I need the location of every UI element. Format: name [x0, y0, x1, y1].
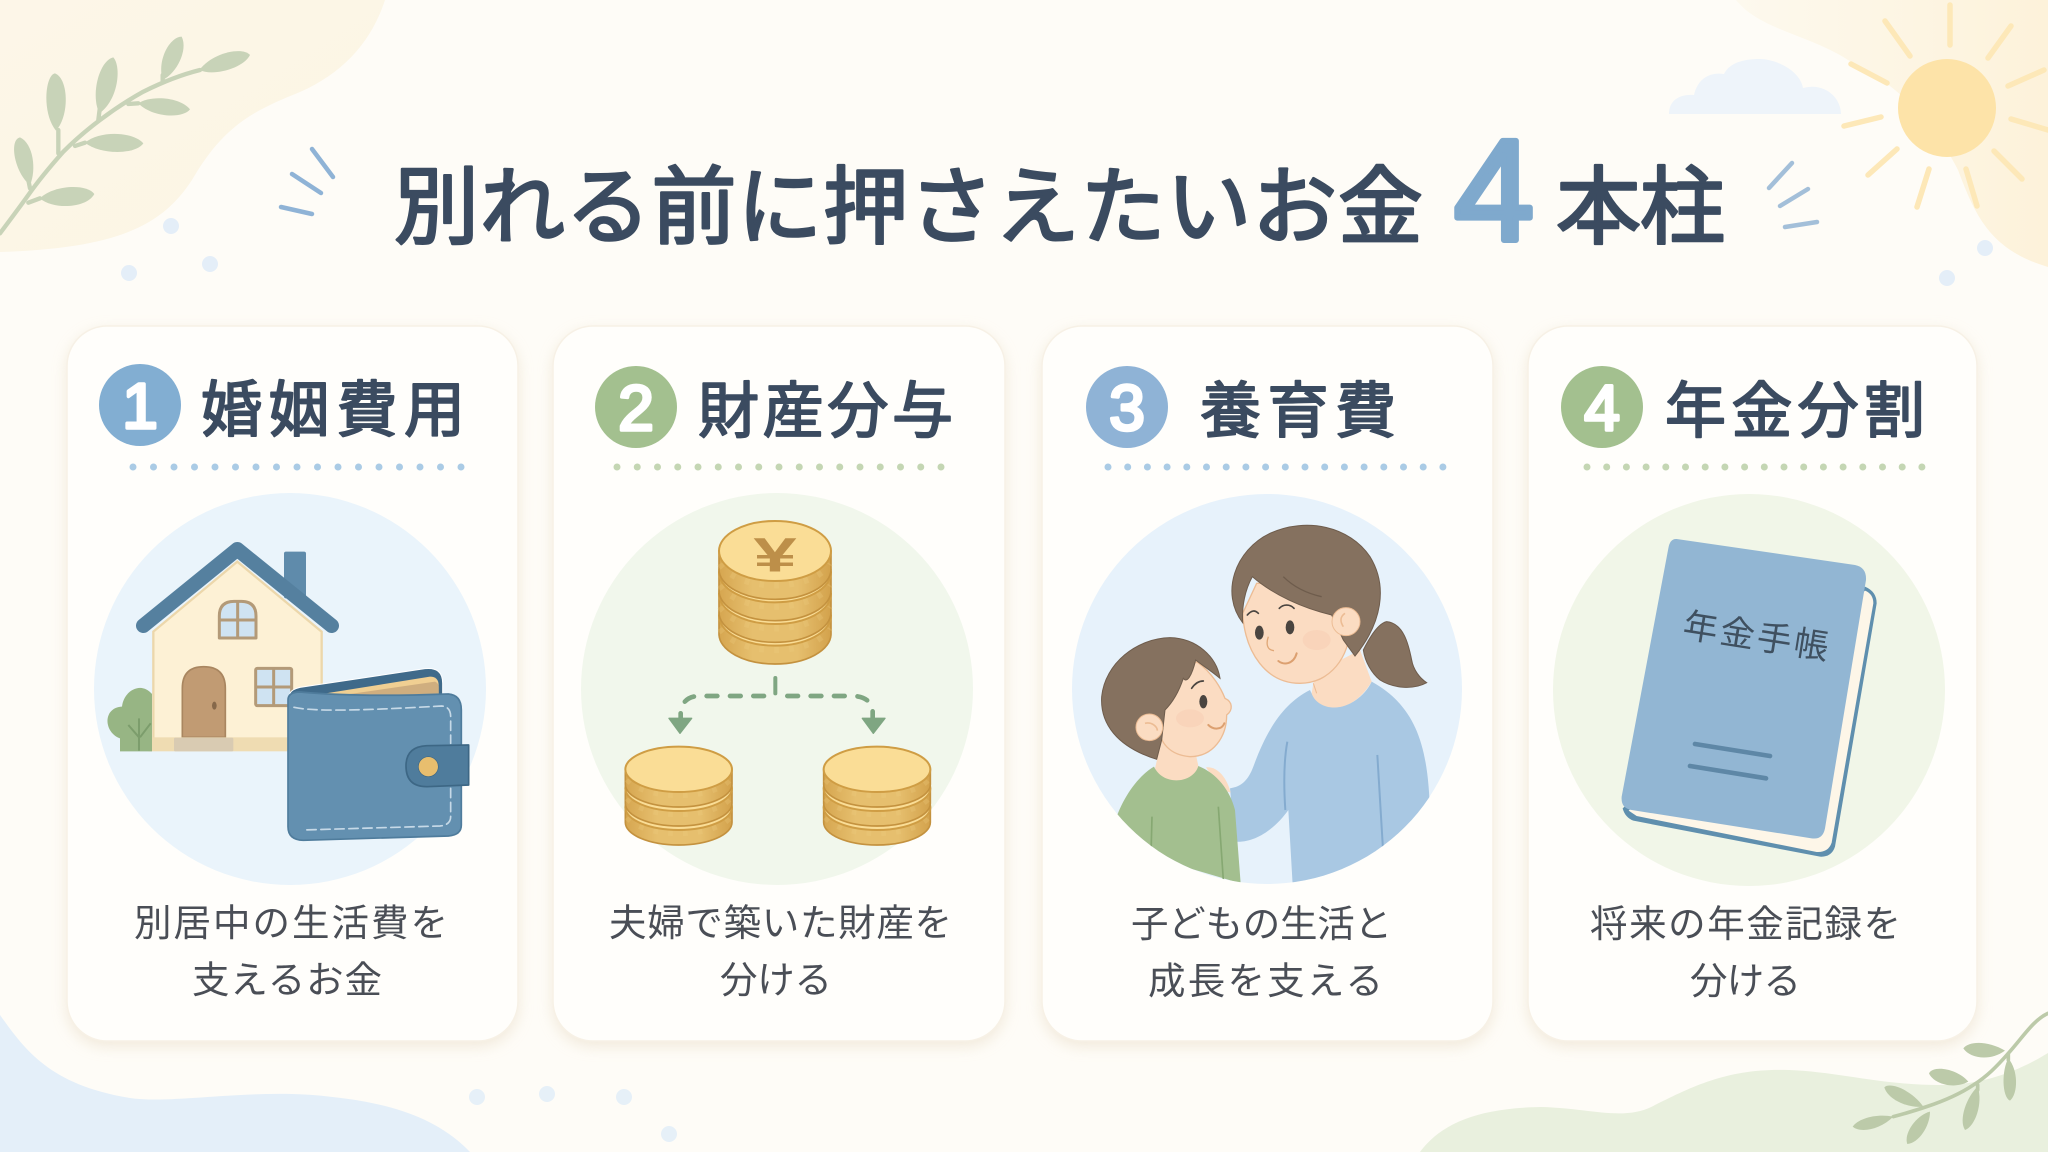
body text: 子どもの生活と: [1131, 903, 1392, 945]
background blob: top left: [0, 0, 385, 252]
number badge 2: [595, 366, 677, 448]
body text: 支えるお金: [192, 959, 382, 1001]
icon: house: [107, 549, 332, 751]
icon: right coin stack: [824, 747, 930, 845]
number badge 2: 2: [618, 372, 654, 444]
icon: left coin stack: [625, 747, 732, 845]
heading: 婚姻費用: 婚姻費用: [201, 376, 465, 444]
number badge 1: [99, 364, 181, 446]
panel: 婚姻費用: [67, 326, 518, 1041]
number badge 1: 1: [122, 370, 158, 442]
handbook label: 年金手帳: [1680, 607, 1831, 668]
icon: yen coin stack: ¥: [753, 527, 797, 582]
heading: 年金分割: 年金分割: [1665, 377, 1925, 445]
background blob: top right: [1736, 0, 2048, 267]
number badge 3: 3: [1109, 372, 1145, 444]
icon: pension handbook: [1622, 539, 1877, 857]
body text: 成長を支える: [1148, 960, 1383, 1002]
heading: 養育費: 養育費: [1200, 377, 1396, 445]
body text: 別居中の生活費を: [134, 902, 448, 944]
dotted divider: [133, 464, 462, 470]
illustration circle: pale green: [1553, 494, 1945, 886]
illustration circle: blue: [1072, 494, 1462, 884]
icon: sparkle lines right of title: [1769, 163, 1817, 227]
dotted divider: [1587, 464, 1922, 470]
panel: 養育費: [1042, 326, 1493, 1041]
body text: 分ける: [720, 959, 832, 1001]
icon: mother and child: [1102, 525, 1430, 885]
heading: 財産分与: 財産分与: [698, 377, 953, 445]
decorative dots top right: [1939, 240, 1993, 286]
number badge 4: 4: [1584, 372, 1620, 444]
body text: [1590, 903, 1901, 1002]
illustration circle: green: [581, 493, 973, 885]
background blob: bottom left: [0, 1015, 470, 1152]
number badge 4: [1561, 366, 1643, 448]
dotted divider: [617, 464, 942, 470]
dotted divider: [1108, 464, 1444, 470]
body text: [1131, 903, 1392, 1002]
background blob: bottom right: [1420, 1053, 2048, 1152]
body text: 分ける: [1690, 960, 1801, 1002]
arrow: dashed split arrows: [669, 678, 885, 733]
icon: sun with rays: [1844, 5, 2048, 207]
body text: 将来の年金記録を: [1590, 903, 1901, 945]
title: 4: [1454, 110, 1534, 271]
icon: leaf sprig top left: [0, 37, 250, 233]
number badge 3: [1086, 366, 1168, 448]
decorative dots bottom: [469, 1086, 677, 1142]
icon: cloud: [1669, 59, 1841, 114]
body text: [134, 902, 448, 1001]
body text: 夫婦で築いた財産を: [609, 902, 952, 944]
title: 本柱: [1556, 161, 1725, 256]
panel: 年金分割: [1528, 326, 1977, 1041]
illustration circle: blue: [94, 493, 486, 885]
body text: [609, 902, 952, 1001]
title: 別れる前に押さえたいお金: [394, 161, 1423, 256]
title: [394, 110, 1725, 271]
panel: 財産分与: [553, 326, 1005, 1041]
icon: leaf sprig bottom right: [1853, 1013, 2048, 1144]
icon: wallet: [288, 668, 469, 840]
icon: yen coin stack: [719, 521, 831, 664]
icon: sparkle lines left of title: [281, 149, 333, 214]
decorative dots top left: [121, 218, 218, 281]
